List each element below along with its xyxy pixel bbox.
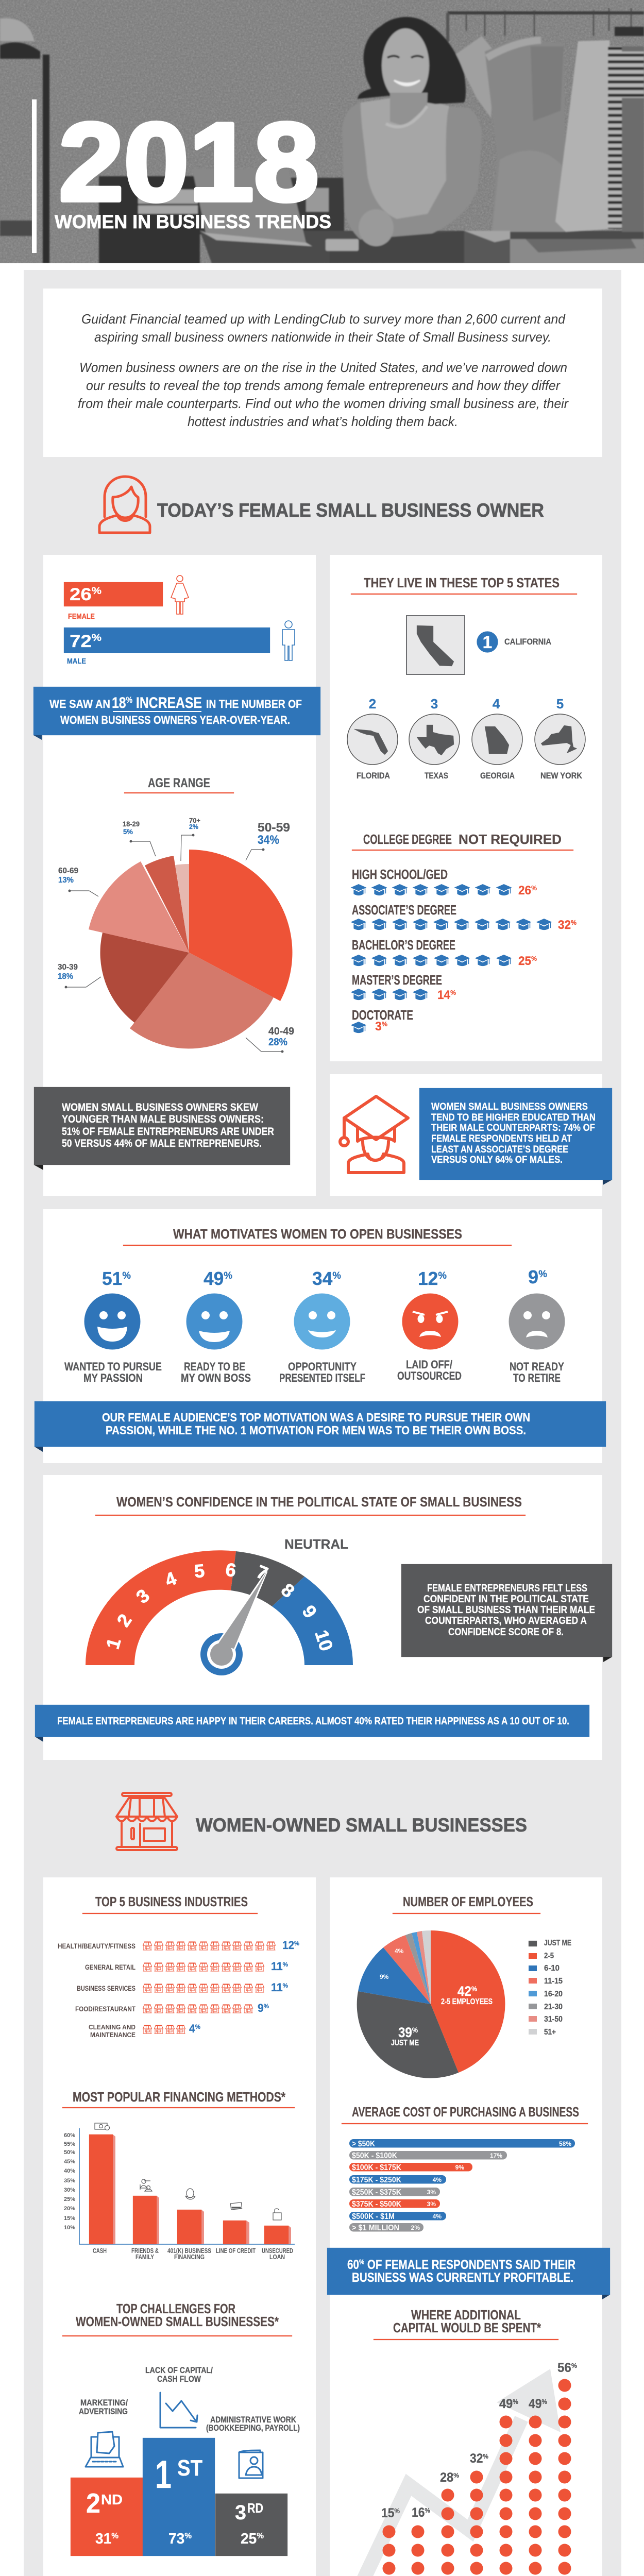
face: laid off outsourced bbox=[397, 1268, 462, 1382]
callout: 18 percent increase: INCREASE bbox=[132, 694, 202, 711]
bar: male 72 percent: % bbox=[92, 633, 101, 643]
gauge chart: 6 bbox=[224, 1558, 238, 1581]
bar: female 26 percent: % bbox=[92, 586, 101, 597]
bar chart: financing methods: 40% bbox=[64, 2168, 75, 2174]
bar chart: financing methods: 60% bbox=[64, 2132, 75, 2139]
callout: 18 percent increase: WOMEN BUSINESS OWNERS YEAR-OVER-YEAR. bbox=[60, 714, 290, 726]
pictogram row: business services bbox=[77, 1981, 288, 1994]
state: Texas bbox=[409, 696, 460, 781]
panel: education callout bbox=[330, 1074, 612, 1196]
face: not ready to retire: TO RETIRE bbox=[513, 1371, 561, 1384]
podium chart: top challenges: ST bbox=[177, 2455, 202, 2481]
bar chart: average cost: 9% bbox=[455, 2164, 464, 2171]
degree row: master: MASTER’S DEGREE bbox=[352, 972, 442, 988]
callout: less confident: FEMALE ENTREPRENEURS FELT LESS bbox=[427, 1583, 587, 1594]
title: WOMEN IN BUSINESS TRENDS bbox=[55, 211, 331, 232]
bar chart: average cost: 2% bbox=[411, 2224, 420, 2231]
dot chart: additional capital: 56 bbox=[557, 2361, 572, 2375]
state: Florida bbox=[347, 696, 398, 781]
callout: women skew younger bbox=[34, 1087, 290, 1170]
podium chart: top challenges: % bbox=[184, 2532, 192, 2540]
callout: less confident bbox=[401, 1564, 612, 1662]
icon: graduate bbox=[340, 1096, 408, 1173]
callout: women skew younger: 50 VERSUS 44% OF MALE ENTREPRENEURS. bbox=[62, 1138, 262, 1149]
pictogram row: health beauty fitness bbox=[58, 1939, 299, 1952]
pie chart: age range: 40-49 bbox=[268, 1026, 294, 1037]
state: New York: 5 bbox=[556, 696, 564, 711]
callout: higher educated: WOMEN SMALL BUSINESS OWNERS bbox=[431, 1101, 588, 1112]
bar: male 72 percent: 72 bbox=[70, 632, 89, 651]
pie chart: age range: 5% bbox=[123, 827, 133, 836]
bar chart: financing methods: 45% bbox=[64, 2159, 75, 2165]
legend: employees: 51+ bbox=[544, 2028, 556, 2037]
heading: where additional capital would be spent bbox=[374, 2307, 558, 2340]
bar chart: financing methods: 25% bbox=[64, 2196, 75, 2202]
callout: higher educated: TEND TO BE HIGHER EDUCATED THAN bbox=[431, 1112, 596, 1123]
panel: introduction: Guidant Financial teamed up with LendingClub to survey more than 2,600 current and bbox=[81, 311, 566, 327]
face: wanted to pursue my passion: % bbox=[122, 1270, 131, 1281]
icon: book with person bbox=[239, 2450, 263, 2478]
legend: employees: JUST ME bbox=[544, 1939, 571, 1947]
pie chart: age range: 70+ bbox=[189, 817, 200, 824]
icon: declining chart bbox=[160, 2393, 197, 2428]
degree row: associate: % bbox=[571, 919, 577, 926]
pie chart: age range: 50-59 bbox=[258, 821, 290, 835]
dot chart: additional capital: % bbox=[513, 2398, 518, 2405]
pie chart: number of employees: 9% bbox=[380, 1973, 389, 1980]
heading: women's confidence: WOMEN’S CONFIDENCE IN THE POLITICAL STATE OF SMALL BUSINESS bbox=[116, 1494, 522, 1510]
callout: top motivation: OUR FEMALE AUDIENCE’S TOP MOTIVATION WAS A DESIRE TO PURSUE THEIR OWN bbox=[102, 1411, 530, 1424]
bar chart: average cost: $175K - $250K bbox=[352, 2176, 401, 2184]
degree row: associate: ASSOCIATE’S DEGREE bbox=[352, 902, 456, 918]
callout: higher educated: FEMALE RESPONDENTS HELD AT bbox=[431, 1133, 572, 1144]
bar: male 72 percent bbox=[64, 628, 270, 666]
heading: age range: AGE RANGE bbox=[148, 776, 210, 790]
callout: higher educated: THEIR MALE COUNTERPARTS: 74% OF bbox=[431, 1123, 595, 1133]
bar chart: average cost: > $1 MILLION bbox=[352, 2224, 399, 2232]
pictogram row: general retail: GENERAL RETAIL bbox=[85, 1963, 135, 1971]
gauge chart: 7 bbox=[253, 1561, 271, 1584]
gauge chart: 8 bbox=[277, 1579, 299, 1602]
podium chart: top challenges: CASH FLOW bbox=[157, 2374, 201, 2384]
dot chart: additional capital bbox=[355, 2361, 581, 2576]
callout: less confident: OF SMALL BUSINESS THAN THEIR MALE bbox=[417, 1604, 595, 1616]
dot chart: additional capital: 28 bbox=[440, 2470, 454, 2485]
podium chart: top challenges: 31 bbox=[95, 2531, 112, 2547]
bar chart: average cost: $100K - $175K bbox=[352, 2163, 401, 2172]
face: not ready to retire bbox=[509, 1266, 565, 1384]
podium chart: top challenges: MARKETING/ bbox=[80, 2398, 128, 2408]
legend: employees bbox=[529, 1939, 571, 2037]
degree row: bachelor: % bbox=[531, 955, 537, 962]
bar chart: average cost bbox=[349, 2139, 575, 2232]
face: opportunity presented itself: % bbox=[332, 1270, 341, 1281]
bar chart: average cost: 58% bbox=[559, 2140, 571, 2147]
panel: introduction: hottest industries and what’s holding them back. bbox=[188, 414, 458, 429]
pie chart: number of employees: % bbox=[471, 1985, 477, 1993]
degree row: master: 14 bbox=[437, 988, 451, 1002]
degree row: doctorate bbox=[351, 1007, 413, 1033]
bar chart: financing methods: 20% bbox=[64, 2206, 75, 2212]
state: Florida: 2 bbox=[369, 696, 376, 711]
legend: employees: 31-50 bbox=[544, 2015, 563, 2024]
bar chart: average cost: 3% bbox=[427, 2200, 436, 2208]
icon: laptop with clipboard bbox=[86, 2432, 123, 2467]
face: laid off outsourced: OUTSOURCED bbox=[397, 1369, 462, 1382]
heading: top challenges bbox=[62, 2301, 292, 2336]
pictogram row: food restaurant: 9 bbox=[258, 2002, 264, 2014]
podium chart: top challenges bbox=[71, 2365, 300, 2556]
legend: employees: 2-5 bbox=[544, 1952, 554, 1960]
degree row: master bbox=[351, 972, 456, 1002]
bar chart: financing methods: 35% bbox=[64, 2178, 75, 2184]
icon: businesswoman bbox=[99, 477, 150, 533]
podium chart: top challenges: % bbox=[257, 2532, 264, 2540]
podium chart: top challenges: LACK OF CAPITAL/ bbox=[145, 2365, 213, 2375]
degree row: master: % bbox=[450, 989, 456, 996]
dot chart: additional capital: 32 bbox=[470, 2451, 484, 2466]
bar chart: financing methods: LINE OF CREDIT bbox=[216, 2247, 256, 2255]
icon: man figure bbox=[282, 621, 295, 660]
state: Georgia: GEORGIA bbox=[480, 771, 515, 781]
state: Texas: 3 bbox=[431, 696, 438, 711]
dot chart: additional capital: 16 bbox=[412, 2505, 426, 2520]
bar chart: average cost: 17% bbox=[490, 2152, 502, 2159]
degree row: high school: HIGH SCHOOL/GED bbox=[352, 867, 448, 882]
callout: 18 percent increase bbox=[33, 687, 320, 740]
gauge chart: 5 bbox=[193, 1560, 206, 1582]
pictogram row: business services: % bbox=[283, 1982, 288, 1989]
callout: 60 percent profitable: 60 bbox=[347, 2258, 362, 2272]
dot chart: additional capital: % bbox=[425, 2506, 430, 2514]
callout: 18 percent increase: WE SAW AN bbox=[49, 698, 110, 710]
panel: introduction: from their male counterparts. Find out who the women driving small business are, their bbox=[78, 396, 569, 411]
dot chart: additional capital: 15 bbox=[381, 2506, 396, 2520]
pictogram row: health beauty fitness: HEALTH/BEAUTY/FITNESS bbox=[58, 1942, 135, 1950]
face: ready to be my own boss: READY TO BE bbox=[184, 1360, 245, 1373]
heading: top 5 business industries: TOP 5 BUSINESS INDUSTRIES bbox=[95, 1894, 248, 1909]
dot chart: additional capital: 49 bbox=[499, 2397, 514, 2411]
podium chart: top challenges: ND bbox=[101, 2492, 123, 2507]
panel: introduction: Women business owners are on the rise in the United States, and we’ve narrowed down bbox=[79, 360, 567, 375]
bar chart: financing methods: FAMILY bbox=[135, 2253, 154, 2261]
face: wanted to pursue my passion: MY PASSION bbox=[83, 1371, 143, 1384]
legend: employees: 11-15 bbox=[544, 1977, 563, 1986]
podium chart: top challenges: ADMINISTRATIVE WORK bbox=[210, 2415, 297, 2425]
state: Georgia bbox=[472, 696, 522, 781]
face: opportunity presented itself: OPPORTUNITY bbox=[288, 1360, 357, 1373]
bar chart: financing methods: CASH bbox=[93, 2247, 107, 2255]
hero banner photo bbox=[0, 0, 644, 264]
bar chart: financing methods: FRIENDS & bbox=[131, 2247, 159, 2255]
face: opportunity presented itself bbox=[279, 1268, 365, 1384]
panel: introduction: aspiring small business owners nationwide in their State of Small Business survey. bbox=[94, 329, 551, 345]
pie chart: age range: 18% bbox=[58, 972, 73, 981]
pie chart: age range: 2% bbox=[189, 823, 198, 831]
pie chart: age range: 34% bbox=[258, 833, 279, 847]
callout: less confident: COUNTERPARTS, WHO AVERAGED A bbox=[425, 1615, 587, 1626]
heading: where additional capital would be spent: WHERE ADDITIONAL bbox=[411, 2307, 521, 2323]
podium chart: top challenges: RD bbox=[247, 2500, 263, 2516]
panel: industries, financing and challenges bbox=[35, 1877, 322, 2576]
podium chart: top challenges: 3 bbox=[235, 2501, 246, 2524]
state: California: 1 bbox=[483, 633, 492, 652]
bar chart: financing methods bbox=[64, 2123, 295, 2261]
callout: women skew younger: 51% OF FEMALE ENTREPRENEURS ARE UNDER bbox=[62, 1126, 274, 1138]
degree row: high school bbox=[351, 867, 537, 897]
gauge chart: 9 bbox=[298, 1601, 321, 1622]
pie chart: number of employees: 4% bbox=[395, 1947, 404, 1955]
pie chart: age range: 13% bbox=[58, 876, 74, 885]
degree row: doctorate: 3 bbox=[375, 1020, 382, 1033]
bar chart: average cost: $50K - $100K bbox=[352, 2151, 397, 2160]
panel: states and degrees bbox=[330, 555, 602, 1061]
bar: female 26 percent: 26 bbox=[70, 585, 89, 604]
pictogram row: cleaning and maintenance: MAINTENANCE bbox=[90, 2031, 135, 2039]
pie chart: age range: 60-69 bbox=[58, 867, 78, 875]
heading: number of employees: NUMBER OF EMPLOYEES bbox=[403, 1894, 533, 1909]
pictogram row: general retail: % bbox=[283, 1961, 288, 1968]
pie chart: number of employees bbox=[357, 1930, 505, 2078]
dot chart: additional capital: % bbox=[571, 2362, 577, 2369]
state: Texas: TEXAS bbox=[425, 771, 448, 781]
state: New York: NEW YORK bbox=[540, 771, 583, 781]
gauge chart bbox=[86, 1550, 353, 1675]
state: Florida: FLORIDA bbox=[357, 771, 390, 781]
pictogram row: food restaurant: % bbox=[264, 2003, 269, 2010]
heading: college degree not required bbox=[352, 832, 573, 851]
bar chart: financing methods: 15% bbox=[64, 2215, 75, 2222]
heading: where additional capital would be spent: CAPITAL WOULD BE SPENT* bbox=[393, 2320, 541, 2335]
dot chart: additional capital: % bbox=[394, 2507, 400, 2515]
face: not ready to retire: 9 bbox=[528, 1266, 538, 1287]
face: laid off outsourced: % bbox=[438, 1270, 447, 1281]
heading: top challenges: TOP CHALLENGES FOR bbox=[116, 2301, 235, 2316]
pie chart: number of employees: 2-5 EMPLOYEES bbox=[441, 1997, 493, 2006]
heading: top challenges: WOMEN-OWNED SMALL BUSINESSES* bbox=[76, 2314, 279, 2329]
heading: college degree not required: COLLEGE DEGREE bbox=[363, 832, 452, 847]
degree row: bachelor: 25 bbox=[518, 954, 532, 968]
heading: today's female small business owner: TODAY’S FEMALE SMALL BUSINESS OWNER bbox=[157, 500, 544, 521]
pictogram row: health beauty fitness: 12 bbox=[282, 1939, 295, 1952]
podium chart: top challenges: 1 bbox=[155, 2453, 172, 2497]
podium chart: top challenges: % bbox=[111, 2532, 118, 2540]
callout: less confident: CONFIDENCE SCORE OF 8. bbox=[448, 1626, 564, 1638]
callout: women skew younger: WOMEN SMALL BUSINESS OWNERS SKEW bbox=[62, 1101, 258, 1113]
heading: most popular financing methods: MOST POPULAR FINANCING METHODS* bbox=[73, 2089, 286, 2105]
face: opportunity presented itself: PRESENTED ITSELF bbox=[279, 1371, 365, 1384]
face: ready to be my own boss: MY OWN BOSS bbox=[181, 1371, 251, 1384]
icon: woman figure bbox=[171, 575, 189, 614]
callout: higher educated: VERSUS ONLY 64% OF MALES. bbox=[431, 1155, 563, 1165]
state: California: CALIFORNIA bbox=[504, 637, 551, 647]
dot chart: additional capital: % bbox=[453, 2471, 459, 2479]
pictogram row: food restaurant bbox=[75, 2002, 269, 2014]
pictogram row: food restaurant: FOOD/RESTAURANT bbox=[75, 2005, 135, 2013]
heading: college degree not required: NOT REQUIRED bbox=[459, 832, 562, 847]
bar chart: financing methods: 30% bbox=[64, 2187, 75, 2193]
degree row: associate: 32 bbox=[558, 918, 572, 932]
podium chart: top challenges: ADVERTISING bbox=[79, 2406, 128, 2416]
heading: women-owned small businesses: WOMEN-OWNED SMALL BUSINESSES bbox=[196, 1815, 527, 1836]
bar: female 26 percent: FEMALE bbox=[68, 612, 95, 621]
face: laid off outsourced: LAID OFF/ bbox=[406, 1358, 452, 1371]
pictogram row: business services: 11 bbox=[271, 1981, 283, 1994]
face: ready to be my own boss: % bbox=[224, 1270, 232, 1281]
label: neutral: NEUTRAL bbox=[284, 1536, 348, 1552]
degree row: associate bbox=[351, 902, 577, 932]
bar chart: financing methods: 50% bbox=[64, 2149, 75, 2156]
podium chart: top challenges: 2 bbox=[86, 2488, 100, 2519]
legend: employees: 16-20 bbox=[544, 1990, 563, 1998]
podium chart: top challenges: 25 bbox=[241, 2531, 257, 2547]
callout: happy in careers bbox=[35, 1705, 589, 1742]
pie chart: number of employees: JUST ME bbox=[391, 2039, 419, 2047]
degree row: doctorate: DOCTORATE bbox=[352, 1007, 413, 1023]
pictogram row: cleaning and maintenance: CLEANING AND bbox=[89, 2023, 135, 2031]
bar chart: financing methods: FINANCING bbox=[174, 2253, 205, 2261]
pie chart: number of employees: % bbox=[412, 2026, 418, 2034]
face: ready to be my own boss: 49 bbox=[204, 1268, 224, 1289]
callout: 18 percent increase: % bbox=[126, 695, 132, 705]
bar chart: average cost: 4% bbox=[433, 2176, 442, 2183]
bar chart: average cost: $500K - $1M bbox=[352, 2212, 395, 2221]
bar chart: average cost: > $50K bbox=[352, 2140, 375, 2148]
bar chart: financing methods: 55% bbox=[64, 2141, 75, 2147]
degree row: doctorate: % bbox=[382, 1020, 387, 1028]
callout: higher educated bbox=[419, 1088, 612, 1185]
podium chart: top challenges: (BOOKKEEPING, PAYROLL) bbox=[206, 2423, 300, 2433]
pictogram row: cleaning and maintenance: 4 bbox=[189, 2022, 195, 2035]
gauge chart: 10 bbox=[311, 1628, 337, 1653]
gauge chart: 4 bbox=[162, 1567, 179, 1591]
callout: top motivation bbox=[35, 1401, 606, 1452]
heading: what motivates women: WHAT MOTIVATES WOMEN TO OPEN BUSINESSES bbox=[173, 1226, 462, 1242]
callout: top motivation: PASSION, WHILE THE NO. 1 MOTIVATION FOR MEN WAS TO BE THEIR OWN BOSS. bbox=[106, 1423, 526, 1437]
pie chart: number of employees: 39 bbox=[398, 2025, 414, 2040]
pie chart: age range bbox=[58, 817, 294, 1053]
bar: male 72 percent: MALE bbox=[67, 657, 86, 666]
callout: 18 percent increase: 18 bbox=[112, 694, 129, 711]
pie chart: age range: 28% bbox=[268, 1037, 287, 1048]
bar chart: average cost: 3% bbox=[427, 2189, 436, 2196]
panel: motivations bbox=[35, 1209, 606, 1463]
bar chart: average cost: 4% bbox=[433, 2213, 442, 2220]
callout: 60 percent profitable: OF FEMALE RESPONDENTS SAID THEIR bbox=[364, 2258, 575, 2272]
degree row: high school: % bbox=[531, 884, 537, 892]
degree row: bachelor: BACHELOR’S DEGREE bbox=[352, 937, 455, 953]
degree row: high school: 26 bbox=[518, 884, 532, 897]
bar chart: average cost: $250K - $375K bbox=[352, 2188, 401, 2197]
bar chart: financing methods: LOAN bbox=[269, 2253, 285, 2261]
bar chart: financing methods: UNSECURED bbox=[262, 2247, 293, 2255]
pie chart: age range: 18-29 bbox=[123, 820, 140, 828]
state: New York bbox=[535, 696, 585, 781]
face: wanted to pursue my passion bbox=[64, 1268, 162, 1384]
bar chart: financing methods: 10% bbox=[64, 2225, 75, 2231]
panel: gender and age bbox=[33, 555, 320, 1196]
legend: employees: 21-30 bbox=[544, 2003, 563, 2011]
pictogram row: cleaning and maintenance: % bbox=[195, 2023, 200, 2030]
bar: female 26 percent bbox=[64, 582, 163, 621]
dot chart: additional capital: % bbox=[541, 2398, 547, 2405]
legend: employees: 6-10 bbox=[544, 1964, 560, 1973]
panel: introduction: our results to reveal the top trends among female entrepreneurs and how they differ bbox=[86, 378, 561, 393]
panel: political confidence bbox=[35, 1475, 612, 1760]
title bbox=[32, 99, 331, 253]
pictogram row: general retail bbox=[85, 1960, 288, 1973]
gauge chart: 2 bbox=[112, 1610, 136, 1631]
callout: less confident: CONFIDENT IN THE POLITICAL STATE bbox=[423, 1594, 589, 1605]
pie chart: number of employees: 42 bbox=[457, 1984, 473, 1999]
callout: 60 percent profitable: BUSINESS WAS CURRENTLY PROFITABLE. bbox=[352, 2270, 573, 2285]
face: wanted to pursue my passion: 51 bbox=[102, 1268, 123, 1289]
gauge chart: 3 bbox=[132, 1585, 154, 1607]
face: laid off outsourced: 12 bbox=[418, 1268, 438, 1289]
state: Georgia: 4 bbox=[493, 696, 500, 711]
face: not ready to retire: NOT READY bbox=[510, 1360, 564, 1373]
state: California bbox=[406, 616, 551, 674]
degree row: bachelor bbox=[351, 937, 537, 968]
pictogram row: health beauty fitness: % bbox=[294, 1940, 299, 1947]
gauge chart: 1 bbox=[102, 1636, 125, 1651]
face: wanted to pursue my passion: WANTED TO PURSUE bbox=[64, 1360, 162, 1373]
dot chart: additional capital: 49 bbox=[529, 2397, 543, 2411]
face: not ready to retire: % bbox=[538, 1269, 547, 1280]
callout: higher educated: LEAST AN ASSOCIATE’S DEGREE bbox=[431, 1144, 568, 1155]
face: ready to be my own boss bbox=[181, 1268, 251, 1384]
pie chart: age range: 30-39 bbox=[58, 963, 78, 972]
icon: storefront bbox=[116, 1793, 177, 1850]
bar chart: average cost: $375K - $500K bbox=[352, 2200, 401, 2209]
bar chart: financing methods: 401(K) BUSINESS bbox=[167, 2247, 211, 2255]
pictogram row: business services: BUSINESS SERVICES bbox=[77, 1984, 135, 1992]
heading: top 5 states: THEY LIVE IN THESE TOP 5 STATES bbox=[364, 575, 560, 590]
pictogram row: general retail: 11 bbox=[271, 1960, 283, 1973]
dot chart: additional capital: % bbox=[483, 2452, 488, 2460]
face: opportunity presented itself: 34 bbox=[312, 1268, 333, 1289]
callout: 60 percent profitable bbox=[327, 2248, 610, 2299]
title: 2018 bbox=[59, 99, 319, 224]
callout: 60 percent profitable: % bbox=[359, 2258, 365, 2266]
panel: introduction bbox=[43, 289, 602, 457]
pictogram row: cleaning and maintenance bbox=[89, 2022, 200, 2039]
podium chart: top challenges: 73 bbox=[168, 2531, 185, 2547]
callout: women skew younger: YOUNGER THAN MALE BUSINESS OWNERS: bbox=[62, 1113, 264, 1125]
callout: 18 percent increase: IN THE NUMBER OF bbox=[206, 698, 302, 710]
panel: employees, cost and capital bbox=[327, 1877, 610, 2576]
